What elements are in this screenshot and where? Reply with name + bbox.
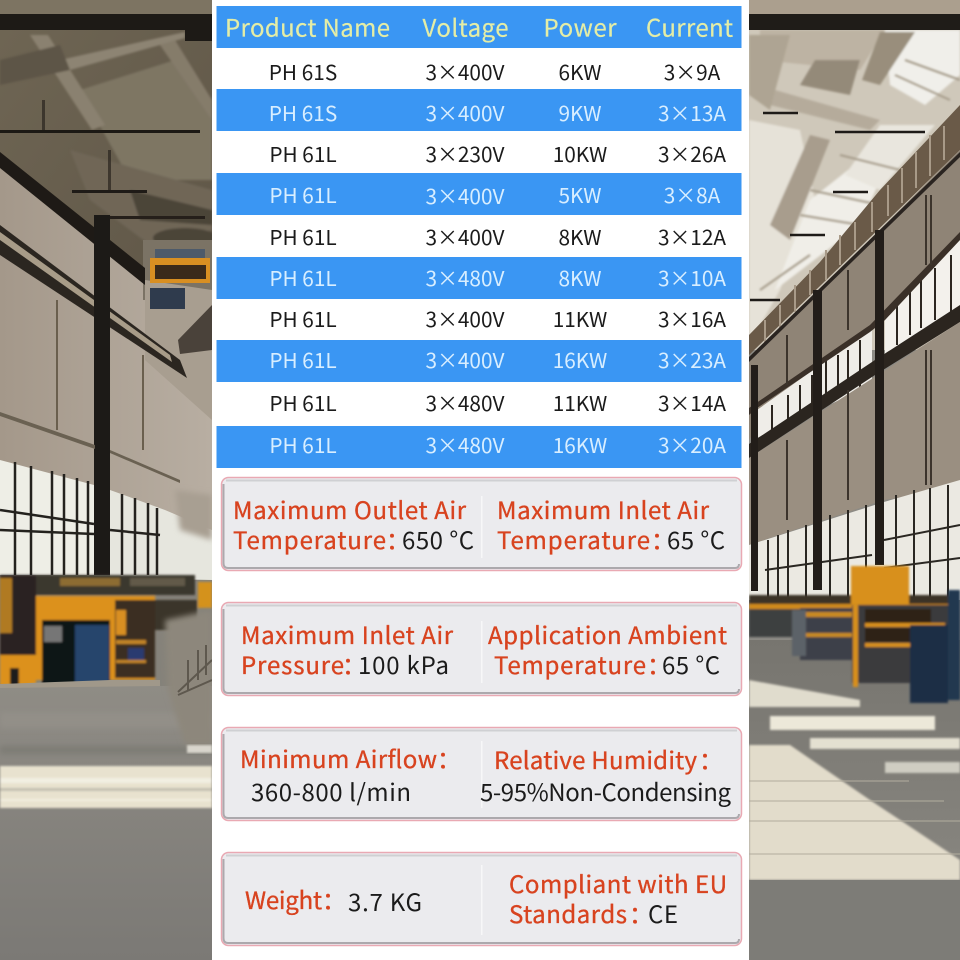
table row 7: 3×16A (658, 303, 726, 333)
table row 3: 10KW (553, 138, 607, 168)
panel: air temperatures: Maximum Outlet Air (233, 491, 467, 526)
lower windows (749, 480, 960, 600)
table row 5: 3×12A (658, 221, 726, 251)
panel: weight and compliance: Standards (509, 895, 627, 930)
table row 10: PH 61L (269, 429, 337, 459)
panel: air temperatures: Temperature (233, 521, 386, 556)
background photo: right factory hall (749, 0, 960, 960)
table header (216, 6, 742, 48)
top beams (0, 14, 960, 41)
table row 4 (216, 173, 742, 215)
table row 9: 11KW (553, 387, 607, 417)
table header: Voltage (422, 8, 508, 44)
panel: air temperatures: 650 °C (402, 521, 474, 556)
panel: airflow and humidity: ： (699, 741, 723, 776)
panel: inlet pressure and ambient temperature: 100 kPa (358, 646, 449, 681)
panel: weight and compliance: ： (322, 881, 346, 916)
table row 1: 3×9A (664, 56, 721, 86)
table row 9: 3×14A (658, 387, 726, 417)
floor (0, 686, 212, 960)
panel: airflow and humidity (222, 728, 742, 820)
table row 2: 3×400V (426, 97, 504, 127)
table row 2: PH 61S (269, 97, 337, 127)
panel: weight and compliance (222, 852, 742, 946)
machines (749, 566, 960, 703)
panel: air temperatures (222, 478, 742, 570)
windows band (885, 240, 960, 356)
floor (749, 640, 960, 842)
table header: Power (544, 8, 617, 44)
sign (150, 258, 210, 283)
panel: inlet pressure and ambient temperature: 65 °C (662, 646, 720, 681)
table row 10: 3×20A (658, 429, 726, 459)
table row 8: 3×23A (658, 344, 726, 374)
table row 4: 3×8A (664, 179, 721, 209)
table row 8: 16KW (553, 344, 607, 374)
table row 2: 9KW (558, 97, 602, 127)
panel: inlet pressure and ambient temperature: Temperature (494, 646, 646, 681)
table row 1 (269, 56, 721, 86)
table row 6: PH 61L (269, 262, 337, 292)
panel: inlet pressure and ambient temperature (222, 602, 742, 696)
table row 9 (269, 387, 726, 417)
table row 1: 3×400V (426, 56, 504, 86)
columns (875, 230, 884, 565)
table row 6: 8KW (558, 262, 602, 292)
table row 5: 3×400V (426, 221, 504, 251)
panel: airflow and humidity: Minimum Airflow (240, 740, 437, 775)
table row 7 (269, 303, 726, 333)
table row 7: 11KW (553, 303, 607, 333)
table row 1: PH 61S (269, 56, 337, 86)
table row 4: 3×400V (426, 180, 504, 210)
table row 8: PH 61L (269, 344, 337, 374)
panel: inlet pressure and ambient temperature: ： (647, 646, 671, 681)
panel: air temperatures: 65 °C (667, 521, 725, 556)
table row 9: 3×480V (426, 387, 504, 417)
table row 1: 6KW (558, 56, 602, 86)
table row 5: 8KW (558, 221, 602, 251)
table row 4: 5KW (558, 179, 602, 209)
panel: air temperatures: ： (386, 521, 410, 556)
table row 10 (216, 426, 742, 468)
panel: airflow and humidity: 5-95%Non-Condensing (480, 773, 731, 808)
table row 4: PH 61L (269, 179, 337, 209)
table row 8 (216, 340, 742, 382)
panel: weight and compliance: ： (629, 895, 653, 930)
table row 3 (269, 138, 726, 168)
table row 5 (269, 221, 726, 251)
table row 2 (216, 89, 742, 131)
table row 2: 3×13A (658, 97, 726, 127)
panel: inlet pressure and ambient temperature: ： (342, 646, 366, 681)
panel: weight and compliance: Compliant with EU (509, 865, 727, 900)
table row 7: PH 61L (269, 303, 337, 333)
table header: Current (646, 8, 733, 44)
panel: weight and compliance: Weight (245, 881, 322, 916)
table row 7: 3×400V (426, 303, 504, 333)
table row 3: PH 61L (269, 138, 337, 168)
panel: airflow and humidity: ： (437, 740, 461, 775)
panel: weight and compliance: 3.7 KG (348, 883, 422, 918)
panel: air temperatures: Temperature (497, 521, 650, 556)
table row 8: 3×400V (426, 344, 504, 374)
table row 5: PH 61L (269, 221, 337, 251)
table row 10: 3×480V (426, 429, 504, 459)
panel: air temperatures: Maximum Inlet Air (497, 491, 710, 526)
upper wall (749, 150, 960, 440)
table row 6: 3×10A (658, 262, 726, 292)
table header: Product Name (225, 8, 390, 44)
table row 3: 3×230V (426, 138, 504, 168)
windows (0, 460, 94, 575)
panel: inlet pressure and ambient temperature: Pressure (241, 646, 344, 681)
center white column (212, 0, 749, 960)
frieze (749, 105, 960, 355)
table row 6: 3×480V (426, 262, 504, 292)
panel: inlet pressure and ambient temperature: Application Ambient (488, 616, 727, 651)
panel: weight and compliance: CE (648, 895, 678, 930)
table row 6 (216, 257, 742, 299)
table row 3: 3×26A (658, 138, 726, 168)
panel: airflow and humidity: Relative Humidity (494, 741, 697, 776)
panel: air temperatures: ： (651, 521, 675, 556)
panel: inlet pressure and ambient temperature: Maximum Inlet Air (241, 616, 454, 651)
background photo: left factory hall (0, 0, 217, 960)
table row 9: PH 61L (269, 387, 337, 417)
panel: airflow and humidity: 360-800 l/min (251, 773, 411, 808)
lower wall (749, 322, 960, 545)
table row 10: 16KW (553, 429, 607, 459)
